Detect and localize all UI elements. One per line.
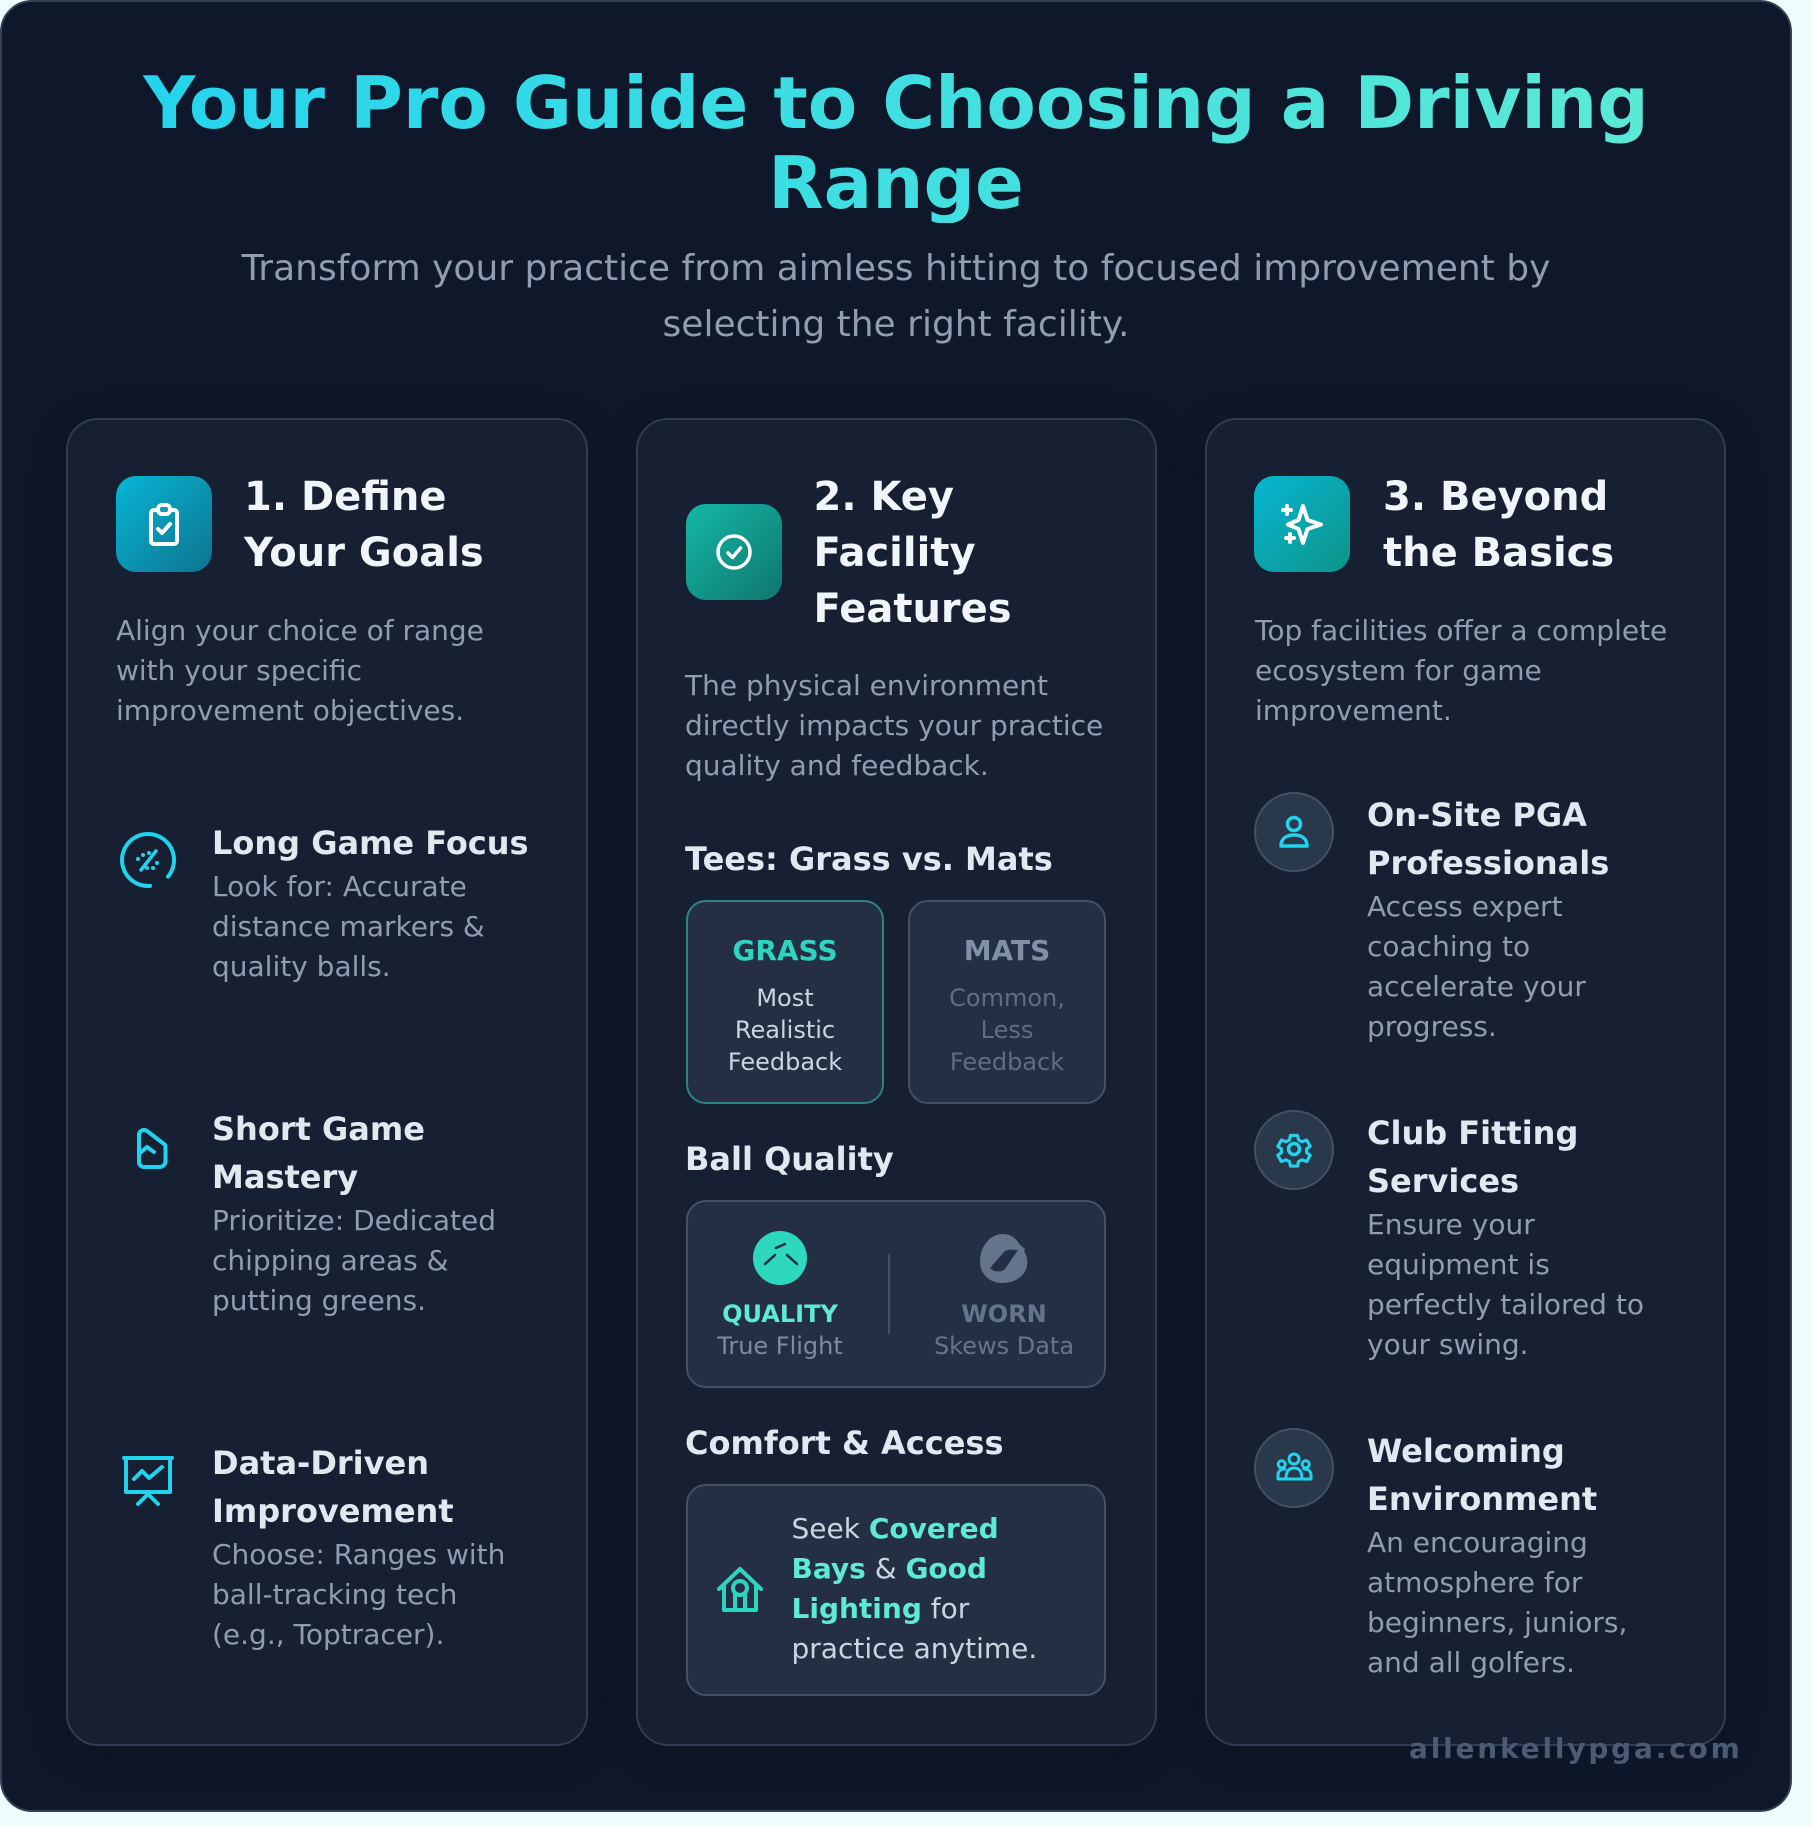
- text: step 1 intro: with your specific: [116, 654, 362, 687]
- heading: step 1: [244, 474, 484, 576]
- item: short game mastery: Short Game: [212, 1110, 425, 1148]
- item: club fitting services: Club Fitting: [1367, 1114, 1578, 1152]
- heading: step 1: 1. Define: [244, 474, 447, 520]
- box: ball quality: [686, 1200, 1106, 1388]
- heading: ball quality: Ball Quality: [685, 1140, 894, 1178]
- icon: target: [120, 832, 176, 888]
- item: data-driven improvement: Improvement: [212, 1492, 454, 1530]
- box: mats: [908, 900, 1106, 1104]
- item: short game mastery: Mastery: [212, 1158, 358, 1196]
- item: data-driven improvement: Data-Driven: [212, 1444, 429, 1482]
- subtitle: [242, 248, 1550, 345]
- item: welcoming environment: [1367, 1432, 1627, 1679]
- item: welcoming environment: beginners, juniors,: [1367, 1606, 1627, 1639]
- item: on-site pga professionals: Access expert: [1367, 890, 1563, 923]
- box: grass: [686, 900, 884, 1104]
- box: mats: Feedback: [950, 1048, 1064, 1076]
- text: worn: [934, 1300, 1074, 1360]
- box: mats: Less: [981, 1016, 1033, 1044]
- text: step 1 intro: improvement objectives.: [116, 694, 464, 727]
- item: on-site pga professionals: On-Site PGA: [1367, 796, 1587, 834]
- heading: comfort: Comfort & Access: [685, 1424, 1003, 1462]
- item: short game mastery: [212, 1110, 496, 1317]
- item: long game focus: distance markers &: [212, 910, 485, 943]
- icon: sparkles: [1254, 476, 1350, 572]
- text: step 3 intro: Top facilities offer a complete: [1255, 614, 1667, 647]
- text: worn: WORN: [961, 1300, 1047, 1328]
- text: worn: Skews Data: [934, 1332, 1074, 1360]
- text: step 3 intro: [1254, 614, 1667, 727]
- heading: step 3: [1383, 474, 1614, 576]
- item: on-site pga professionals: Professionals: [1367, 844, 1609, 882]
- text: step 2 intro: The physical environment: [685, 669, 1048, 702]
- item: welcoming environment: An encouraging: [1367, 1526, 1588, 1559]
- item: short game mastery: Prioritize: Dedicated: [212, 1204, 496, 1237]
- item: short game mastery: chipping areas &: [212, 1244, 448, 1277]
- item: welcoming environment: atmosphere for: [1367, 1566, 1582, 1599]
- icon: quality ball: [753, 1231, 807, 1285]
- icon: check circle: [686, 504, 782, 600]
- panel: define your goals: [66, 418, 588, 1746]
- icon: clipboard check: [116, 476, 212, 572]
- heading: tees: Tees: Grass vs. Mats: [685, 840, 1053, 878]
- text: step 1 intro: Align your choice of range: [116, 614, 484, 647]
- text: comfort: Bays & Good: [792, 1552, 987, 1584]
- item: on-site pga professionals: coaching to: [1367, 930, 1530, 963]
- icon: presentation chart: [122, 1456, 174, 1506]
- item: club fitting services: equipment is: [1367, 1248, 1550, 1281]
- heading: step 1: Your Goals: [244, 530, 484, 576]
- watermark: allenkellypga.com: [1409, 1732, 1743, 1765]
- text: comfort: Seek Covered: [792, 1512, 999, 1544]
- item: club fitting services: Ensure your: [1367, 1208, 1535, 1241]
- text: comfort: [792, 1512, 1037, 1664]
- item: long game focus: Long Game Focus: [212, 824, 529, 862]
- title: Your Pro Guide to Choosing a Driving: [143, 61, 1649, 145]
- text: comfort: practice anytime.: [792, 1632, 1037, 1664]
- box: grass: Most: [756, 984, 814, 1012]
- text: step 3 intro: improvement.: [1255, 694, 1452, 727]
- icon: person: [1254, 792, 1334, 872]
- heading: step 2: 2. Key: [814, 474, 954, 520]
- icon: group: [1254, 1428, 1334, 1508]
- icon: worn ball: [980, 1234, 1028, 1283]
- heading: step 2: Facility: [814, 530, 976, 576]
- item: long game focus: quality balls.: [212, 950, 391, 983]
- item: club fitting services: perfectly tailored to: [1367, 1288, 1644, 1321]
- heading: step 2: Features: [814, 586, 1012, 632]
- subtitle: selecting the right facility.: [663, 304, 1129, 345]
- box: grass: Realistic: [735, 1016, 835, 1044]
- item: data-driven improvement: ball-tracking tech: [212, 1578, 457, 1611]
- divider: [888, 1254, 890, 1334]
- icon: short game: [137, 1128, 168, 1169]
- text: comfort: Lighting for: [792, 1592, 969, 1624]
- box: mats: MATS: [964, 934, 1050, 967]
- box: grass: Feedback: [728, 1048, 842, 1076]
- subtitle: Transform your practice from aimless hitting to focused improvement by: [242, 248, 1550, 289]
- item: welcoming environment: and all golfers.: [1367, 1646, 1575, 1679]
- box: comfort: [686, 1484, 1106, 1696]
- box: mats: Common,: [949, 984, 1065, 1012]
- panel: key facility features: [636, 418, 1156, 1746]
- icon: gear: [1254, 1110, 1334, 1190]
- item: data-driven improvement: [212, 1444, 505, 1651]
- title: [66, 63, 1726, 223]
- heading: step 3: the Basics: [1383, 530, 1614, 576]
- item: short game mastery: putting greens.: [212, 1284, 426, 1317]
- item: welcoming environment: Welcoming: [1367, 1432, 1565, 1470]
- text: quality: True Flight: [717, 1332, 843, 1360]
- item: data-driven improvement: (e.g., Toptracer).: [212, 1618, 444, 1651]
- item: welcoming environment: Environment: [1367, 1480, 1597, 1518]
- text: quality: QUALITY: [722, 1300, 838, 1328]
- text: step 2 intro: [684, 669, 1103, 782]
- item: data-driven improvement: Choose: Ranges with: [212, 1538, 505, 1571]
- box: grass: GRASS: [732, 934, 838, 967]
- heading: step 2: [814, 474, 1012, 632]
- item: club fitting services: [1367, 1114, 1644, 1361]
- item: on-site pga professionals: progress.: [1367, 1010, 1497, 1043]
- item: long game focus: [212, 824, 529, 983]
- item: long game focus: Look for: Accurate: [212, 870, 467, 903]
- text: step 2 intro: directly impacts your practice: [685, 709, 1103, 742]
- panel: beyond the basics: [1205, 418, 1726, 1746]
- text: quality: [717, 1300, 843, 1360]
- text: step 2 intro: quality and feedback.: [685, 749, 989, 782]
- item: club fitting services: Services: [1367, 1162, 1519, 1200]
- text: step 1 intro: [116, 614, 484, 727]
- item: on-site pga professionals: [1367, 796, 1609, 1043]
- heading: step 3: 3. Beyond: [1383, 474, 1608, 520]
- icon: house: [716, 1566, 764, 1612]
- title: Range: [768, 141, 1024, 225]
- item: on-site pga professionals: accelerate your: [1367, 970, 1586, 1003]
- text: step 3 intro: ecosystem for game: [1255, 654, 1542, 687]
- item: club fitting services: your swing.: [1367, 1328, 1529, 1361]
